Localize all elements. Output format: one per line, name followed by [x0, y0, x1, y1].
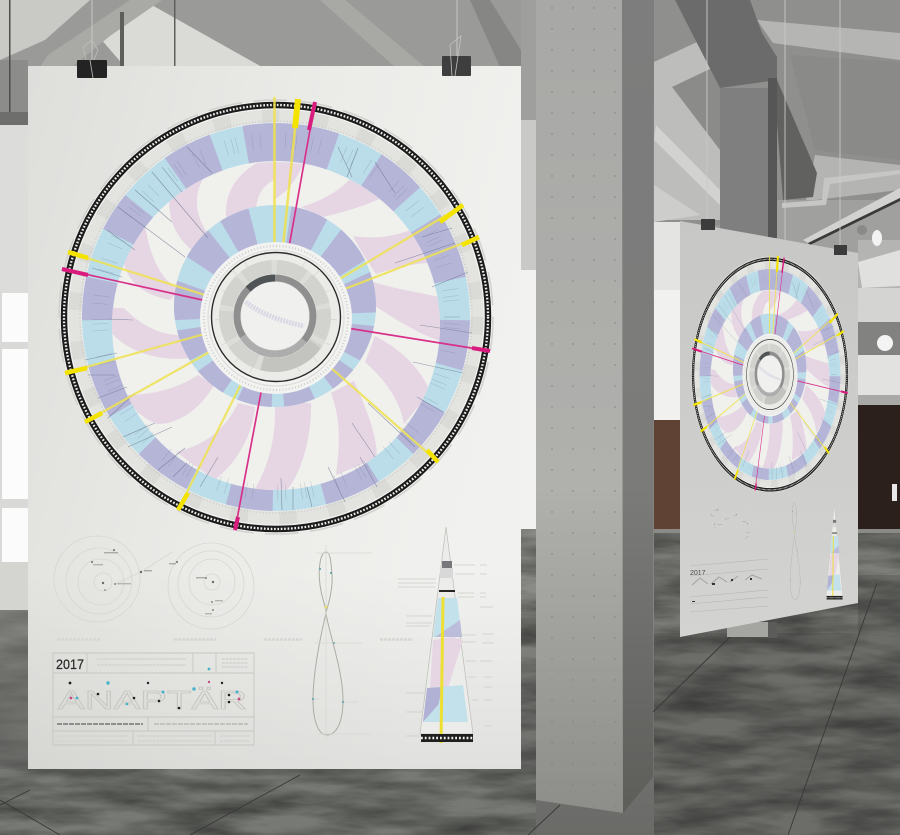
- orbit diagrams: [54, 536, 254, 629]
- cone pink band: [430, 637, 463, 688]
- cone grey sections: [442, 561, 452, 568]
- cone chart: [398, 527, 494, 743]
- binder clip left: [77, 40, 107, 78]
- intro text lines: [57, 659, 250, 741]
- poster 2 title block: 2017: [690, 570, 706, 577]
- figure-eight curve: [313, 552, 343, 735]
- grey year ring: [237, 278, 313, 354]
- cone lower blue band: [423, 685, 468, 722]
- pink swirl petals: [104, 156, 446, 492]
- poster 2 wires: [707, 0, 840, 247]
- centre tick rings: [204, 246, 348, 390]
- cone leader labels: [398, 565, 494, 736]
- main disc chart: [59, 97, 493, 534]
- title block grid: [53, 653, 254, 745]
- poster 2 title block: [690, 559, 768, 612]
- inner coloured ring: [190, 230, 362, 402]
- outer coloured ring: [101, 142, 451, 492]
- grey scale band: [75, 116, 477, 518]
- poster: second hanging poster: [680, 0, 858, 637]
- analemma chart: [312, 545, 372, 740]
- poster 2 clips: [701, 219, 847, 255]
- background: concrete floor: [0, 529, 900, 835]
- sector label ring: [224, 265, 326, 367]
- coloured spokes: [62, 97, 490, 530]
- planets: [91, 549, 223, 614]
- centre disc: [200, 242, 352, 394]
- year: 2017: [56, 656, 84, 672]
- cone outline: [420, 527, 473, 734]
- markers: [312, 568, 344, 703]
- milky way band: [246, 302, 304, 326]
- title dots: [69, 668, 240, 709]
- title block: [53, 653, 254, 749]
- cone yellow stripe: [441, 597, 443, 743]
- section captions: [57, 638, 413, 641]
- poster 2 orbit diagrams: [700, 503, 760, 545]
- cone base film strip: [421, 734, 473, 742]
- outer tick labels: [59, 100, 493, 534]
- footnote line: [54, 748, 212, 750]
- binder clip right: [442, 36, 471, 76]
- background: gallery ceiling: [0, 0, 900, 300]
- disc base: [60, 101, 492, 533]
- spotlight lamp: [857, 225, 900, 288]
- star map: [241, 282, 309, 350]
- data lines: [85, 141, 472, 510]
- axis and leader lines: [313, 545, 372, 740]
- hanging wires: [92, 0, 457, 60]
- poster 2 analemma: [790, 499, 810, 602]
- background: white walls and windows: [0, 112, 900, 610]
- title: ANAPTÄR: [58, 685, 247, 715]
- column: front concrete pillar: [536, 0, 654, 813]
- column: rear column base: [727, 622, 777, 638]
- poster 2 disc: [691, 255, 849, 493]
- background: rear column: [720, 78, 777, 238]
- centre black ring: [212, 252, 340, 382]
- cone lower purple wedge: [423, 687, 443, 722]
- poster: main hanging poster: [28, 66, 521, 769]
- cone purple wedge: [435, 620, 462, 637]
- poster 2 cone chart: [819, 505, 849, 600]
- star web lines: [215, 262, 337, 372]
- cone blue band: [433, 598, 462, 637]
- outer film-strip ring: [64, 105, 488, 529]
- subtitle lines: [57, 723, 143, 725]
- orbit rings: [54, 536, 254, 629]
- middle field: [112, 162, 440, 490]
